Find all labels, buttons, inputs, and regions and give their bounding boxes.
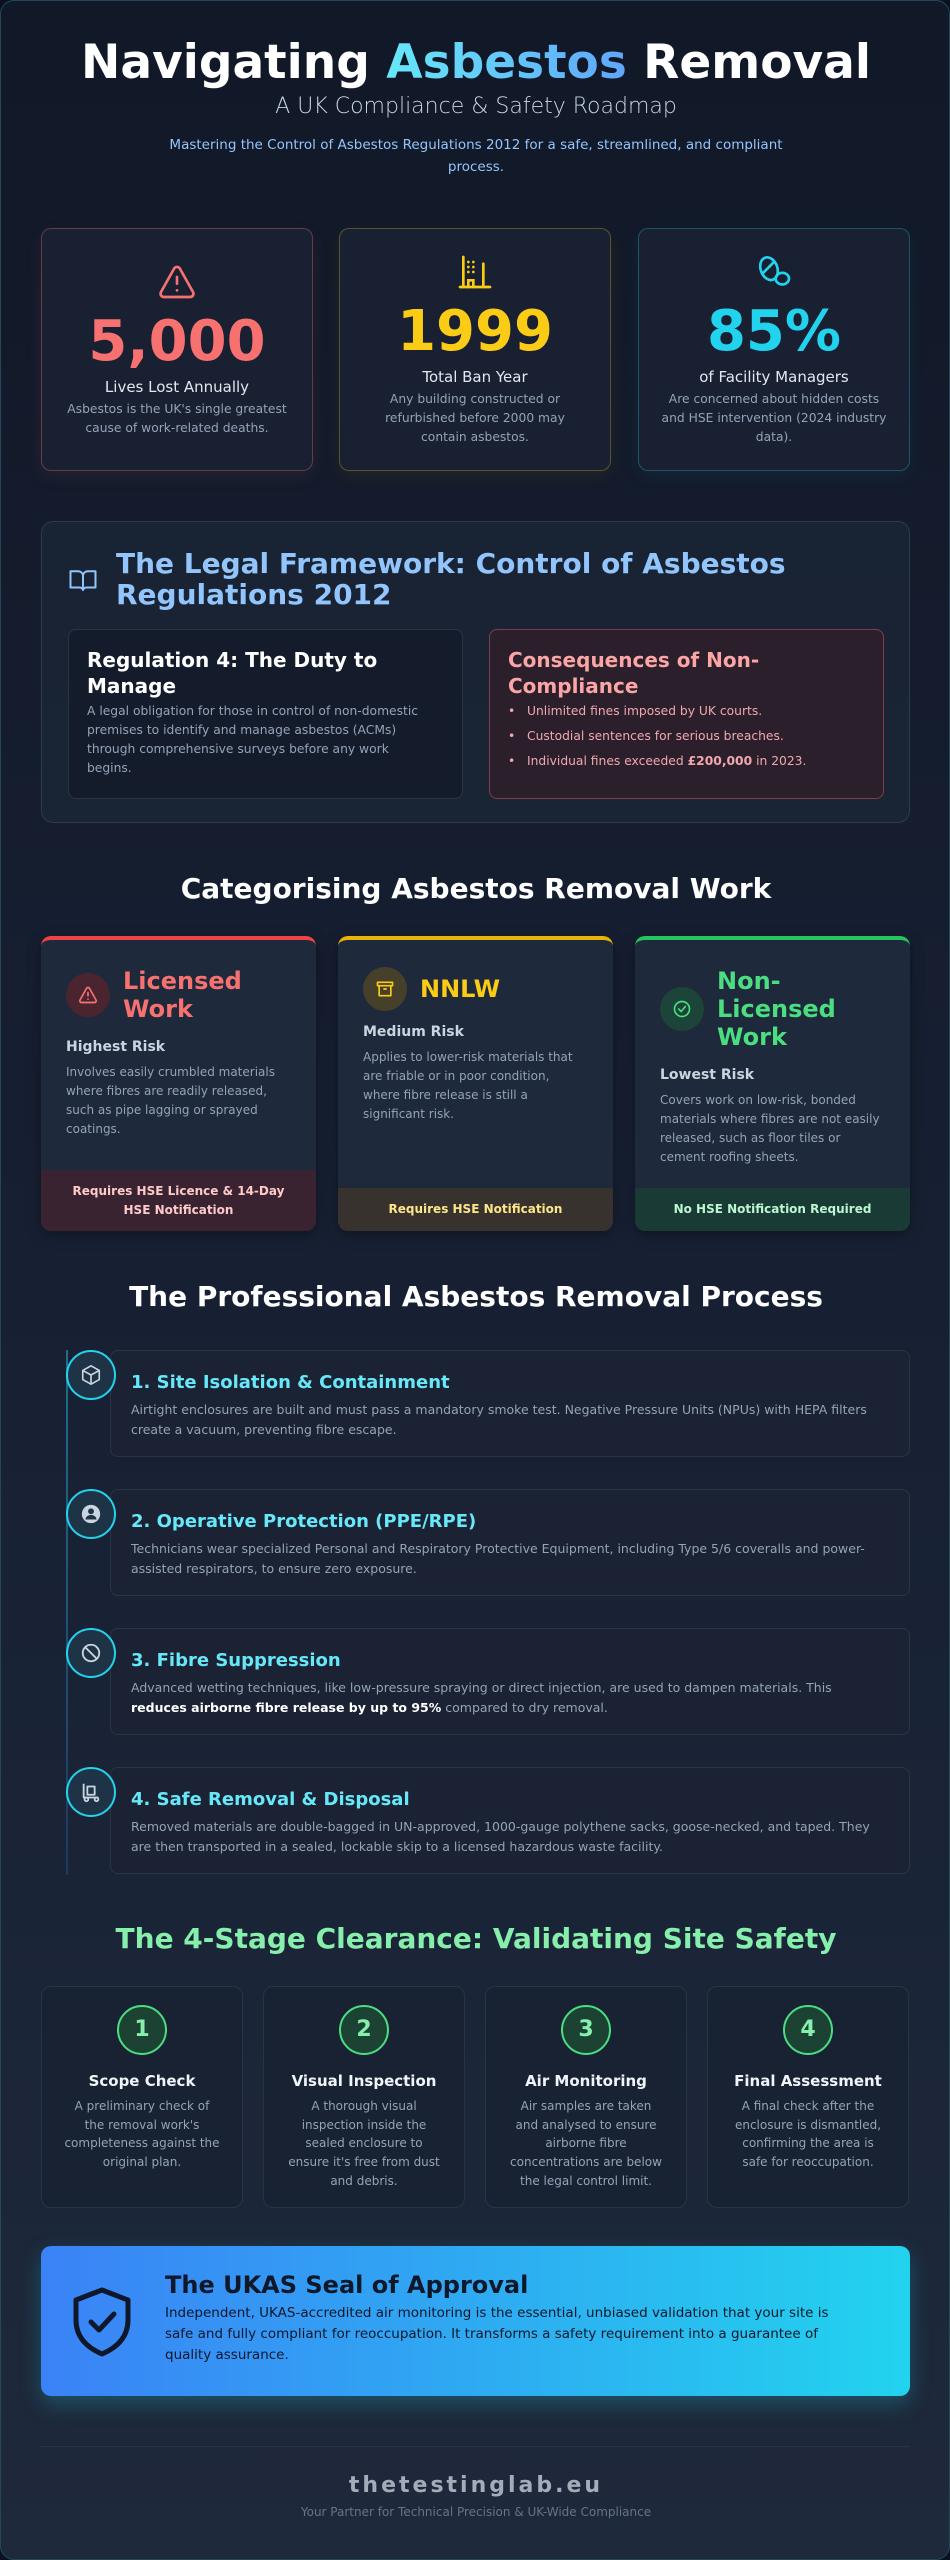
UKAS text: Independent, UKAS-accredited air monitoring is the essential, unbiased validation that your site is: [165, 2305, 829, 2321]
stage 2: ensure it's free from dust: [288, 2155, 440, 2169]
stage 4: A final check after the: [742, 2099, 874, 2113]
box: consequences: • Custodial sentences for serious breaches.: [508, 729, 784, 743]
step 2: 2. Operative Protection (PPE/RPE): [131, 1511, 476, 1532]
icon: book: [70, 570, 96, 591]
box: consequences: • Individual fines exceeded £200,000 in 2023.: [508, 754, 806, 768]
stat card: 1999: contain asbestos.: [421, 430, 529, 444]
box: consequences: • Unlimited fines imposed by UK courts.: [508, 704, 762, 718]
UKAS text: [165, 2271, 829, 2363]
icon: ban: [66, 1628, 116, 1678]
box: consequences: [489, 629, 884, 799]
banner: UKAS: [41, 2246, 910, 2396]
stage 4: safe for reoccupation.: [742, 2155, 874, 2169]
stage 3: [485, 1986, 687, 2208]
icon: shield: [74, 2288, 130, 2356]
stat card: 85%: and HSE intervention (2024 industry: [662, 411, 886, 425]
stat card: 1999: refurbished before 2000 may: [385, 411, 565, 425]
card: non-licensed work: Lowest Risk: [660, 1067, 754, 1083]
card: non-licensed work: Non-Licensed Work: [717, 967, 836, 1051]
subtitle: A UK Compliance & Safety Roadmap: [275, 94, 677, 119]
step 4: Removed materials are double-bagged in UN-approved, 1000-gauge polythene sacks, goose-necked, and taped. They are then transported in a sealed, lockable skip to a licensed hazardous waste facility.: [131, 1819, 870, 1854]
stage 4: Final Assessment: [734, 2072, 882, 2090]
title: Navigating Asbestos Removal: [81, 35, 871, 90]
stat card: 1999: [339, 228, 611, 471]
stage 3: Air Monitoring: [525, 2072, 647, 2090]
icon: warning: [159, 266, 195, 298]
step 1: 1. Site Isolation & Containment: [131, 1372, 450, 1393]
icon: person: [66, 1489, 116, 1539]
stage 1: Scope Check: [89, 2072, 195, 2090]
card: NNLW: Medium Risk: [363, 1024, 464, 1040]
timeline line: [66, 1350, 68, 1875]
card: licensed work: [41, 936, 316, 1231]
heading: clearance: The 4-Stage Clearance: Validating Site Safety: [116, 1922, 836, 1955]
icon: cube: [66, 1350, 116, 1400]
stage 2: Visual Inspection: [292, 2072, 436, 2090]
heading: categorising: Categorising Asbestos Removal Work: [181, 872, 771, 905]
stage 1: original plan.: [103, 2155, 181, 2169]
stage 3: 3: [578, 2017, 594, 2042]
stat card: 5,000: cause of work-related deaths.: [85, 420, 269, 434]
box: consequences: Consequences of Non-Compliance: [508, 648, 759, 698]
stat card: 1999: 1999: [397, 299, 553, 364]
stat card: 85%: [638, 228, 910, 471]
card: non-licensed work: Covers work on low-risk, bonded materials where fibres are not easily released, such as floor tiles or cement roofing sheets.: [660, 1093, 880, 1164]
step 3: [110, 1628, 910, 1735]
UKAS text: safe and fully compliant for reoccupation. It transforms a safety requirement into a guarantee of: [165, 2326, 818, 2342]
stage 1: 1: [134, 2017, 150, 2042]
step 2: Technicians wear specialized Personal and Respiratory Protective Equipment, including Type 5/6 coveralls and power-assisted respirators, to ensure zero exposure.: [131, 1541, 865, 1576]
card: licensed work: Licensed Work: [123, 967, 242, 1023]
stage 2: inspection inside the: [302, 2118, 426, 2132]
stage 4: [707, 1986, 909, 2208]
stage 4: 4: [800, 2017, 816, 2042]
stat card: 5,000: [41, 228, 313, 471]
step 2: [110, 1489, 910, 1596]
stage 1: completeness against the: [64, 2136, 220, 2150]
footer brand: thetestinglab.eu: [349, 2473, 603, 2498]
step 4: 4. Safe Removal & Disposal: [131, 1789, 410, 1810]
box: regulation 4: A legal obligation for those in control of non-domestic premises to identify and manage asbestos (ACMs) through comprehensive surveys before any work begins.: [87, 704, 418, 775]
stage 2: 2: [356, 2017, 372, 2042]
stage 1: [41, 1986, 243, 2208]
stage 3: and analysed to ensure: [516, 2118, 656, 2132]
step 1: [110, 1350, 910, 1457]
footer tagline: Your Partner for Technical Precision & UK-Wide Compliance: [301, 2505, 651, 2519]
stage 3: airborne fibre: [545, 2136, 627, 2150]
stage 3: the legal control limit.: [520, 2174, 652, 2188]
icon: dolly: [66, 1767, 116, 1817]
stat card: 5,000: 5,000: [88, 308, 266, 374]
stat card: 85%: data).: [756, 430, 792, 444]
card: NNLW: [338, 936, 613, 1231]
step 4: [110, 1767, 910, 1874]
stat card: 5,000: Asbestos is the UK's single greatest: [67, 402, 287, 416]
stage 3: Air samples are taken: [521, 2099, 651, 2113]
card: non-licensed work: [635, 936, 910, 1231]
stage 4: confirming the area is: [742, 2136, 874, 2150]
stat card: 85%: of Facility Managers: [699, 368, 849, 386]
box: regulation 4: Regulation 4: The Duty to Manage: [87, 648, 377, 698]
box: regulation 4: [68, 629, 463, 799]
card: NNLW: Applies to lower-risk materials that are friable or in poor condition, where fibre release is still a significant risk.: [363, 1050, 573, 1121]
UKAS text: The UKAS Seal of Approval: [165, 2271, 528, 2299]
step 3: 3. Fibre Suppression: [131, 1650, 341, 1671]
card: licensed work: Requires HSE Licence & 14-Day HSE Notification: [73, 1184, 284, 1216]
panel: legal framework: [41, 521, 910, 823]
step 1: Airtight enclosures are built and must pass a mandatory smoke test. Negative Pressure Units (NPUs) with HEPA filters create a vacuum, preventing fibre escape.: [131, 1402, 867, 1437]
stat card: 5,000: Lives Lost Annually: [105, 378, 249, 396]
card: NNLW: Requires HSE Notification: [389, 1202, 562, 1216]
card: licensed work: Highest Risk: [66, 1039, 165, 1055]
stage 2: [263, 1986, 465, 2208]
icon: building: [458, 256, 492, 288]
heading: process: The Professional Asbestos Removal Process: [129, 1280, 823, 1313]
icon: pills: [758, 256, 790, 286]
card: NNLW: NNLW: [420, 975, 500, 1003]
stage 1: the removal work's: [85, 2118, 199, 2132]
stage 1: A preliminary check of: [75, 2099, 209, 2113]
card: non-licensed work: No HSE Notification Required: [674, 1202, 871, 1216]
UKAS text: quality assurance.: [165, 2347, 289, 2363]
stat card: 85%: Are concerned about hidden costs: [669, 392, 879, 406]
stat card: 1999: Total Ban Year: [422, 368, 528, 386]
stage 4: enclosure is dismantled,: [735, 2118, 881, 2132]
intro text: Mastering the Control of Asbestos Regulations 2012 for a safe, streamlined, and compliant process.: [169, 137, 783, 175]
card: licensed work: Involves easily crumbled materials where fibres are readily released, such as pipe lagging or sprayed coatings.: [66, 1065, 275, 1136]
stage 2: A thorough visual: [311, 2099, 417, 2113]
step 3: Advanced wetting techniques, like low-pressure spraying or direct injection, are used to dampen materials. This reduces airborne fibre release by up to 95% compared to dry removal.: [131, 1680, 832, 1715]
stage 2: and debris.: [330, 2174, 398, 2188]
stat card: 85%: 85%: [707, 299, 841, 364]
stat card: 1999: Any building constructed or: [390, 392, 560, 406]
heading: legal framework: The Legal Framework: Control of Asbestos Regulations 2012: [116, 547, 786, 611]
stage 2: sealed enclosure to: [305, 2136, 423, 2150]
stage 3: concentrations are below: [510, 2155, 662, 2169]
